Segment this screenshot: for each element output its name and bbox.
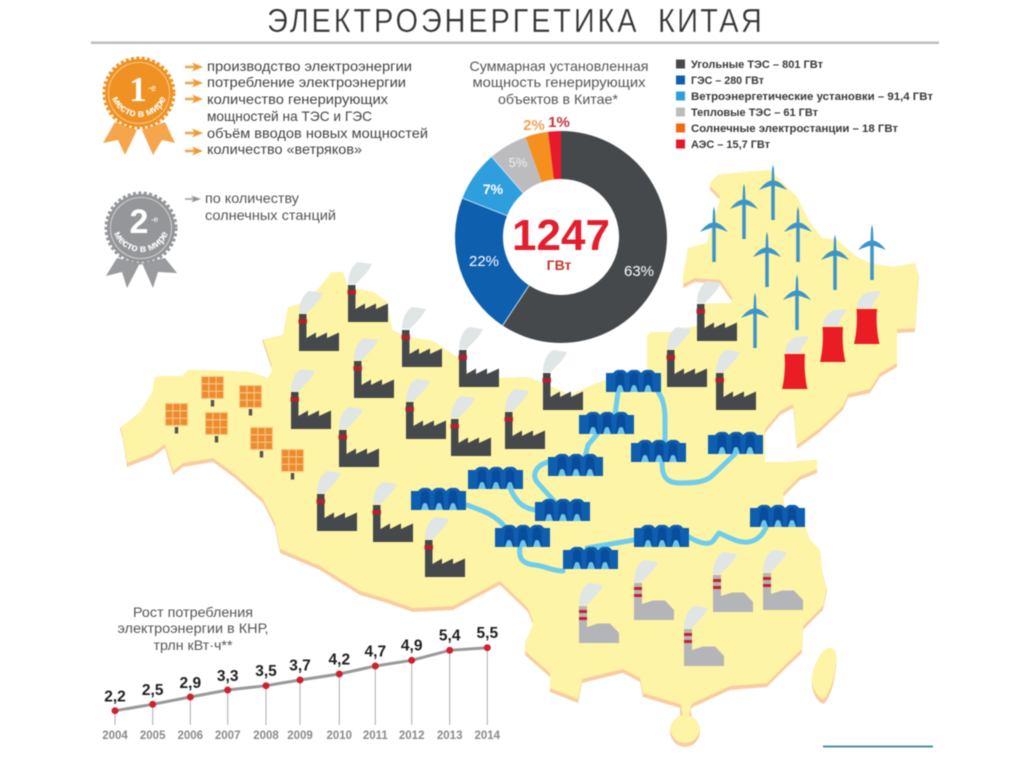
line chart: electricity consumption: 2009 xyxy=(287,730,313,742)
line chart: electricity consumption: 2,2 xyxy=(104,688,126,706)
legend: ГЭС – 280 ГВт xyxy=(691,75,765,87)
badge: 1st place: место в мире xyxy=(112,96,166,118)
donut heading: Суммарная установленная xyxy=(470,58,648,74)
icons: coal power plants xyxy=(290,262,756,577)
line chart: electricity consumption: 4,2 xyxy=(329,652,350,668)
rivers xyxy=(467,392,767,571)
donut chart: 22% xyxy=(469,253,499,270)
list: second place items: солнечных станций xyxy=(205,207,336,223)
line chart: electricity consumption: 3,5 xyxy=(255,663,277,680)
badge: 2nd place: место в мире xyxy=(114,231,168,253)
donut chart: 63% xyxy=(624,263,654,280)
donut chart: 1247 xyxy=(512,211,610,260)
line chart: electricity consumption: 2013 xyxy=(437,730,462,742)
badge: 1st place: -е xyxy=(148,83,156,93)
map of China xyxy=(120,166,919,747)
icons: thermal power plants xyxy=(579,550,803,666)
line chart: electricity consumption: 3,3 xyxy=(217,668,239,685)
badge: 2nd place: 2 xyxy=(130,203,148,241)
line chart: electricity consumption: 4,7 xyxy=(365,644,386,660)
icons: nuclear cooling towers xyxy=(782,291,881,389)
list: first place items xyxy=(185,58,428,157)
badge: 1st place: 1 xyxy=(129,70,147,109)
donut heading: мощность генерирующих xyxy=(472,74,646,90)
line chart: electricity consumption: 5,4 xyxy=(439,628,461,644)
chart heading: трлн кВт·ч** xyxy=(154,637,233,653)
legend xyxy=(676,59,934,151)
line chart: electricity consumption: 2012 xyxy=(399,730,424,742)
line chart: electricity consumption: 2,5 xyxy=(142,682,164,699)
icons: hydro dams xyxy=(411,370,805,569)
legend: Солнечные электростанции – 18 ГВт xyxy=(691,123,899,135)
line chart: electricity consumption: 2008 xyxy=(253,730,279,742)
list: first place items: мощностей на ТЭС и ГЭС xyxy=(207,108,372,124)
line chart: electricity consumption: 2,9 xyxy=(180,675,201,692)
list: first place items: производство электроэнергии xyxy=(207,58,412,74)
icons: wind turbines xyxy=(700,164,886,348)
donut heading: объектов в Китае* xyxy=(498,91,619,107)
line chart: electricity consumption: 3,7 xyxy=(289,658,311,674)
line chart: electricity consumption: 2007 xyxy=(215,730,240,742)
line chart: electricity consumption: 2005 xyxy=(140,730,166,742)
chart heading: Рост потребления xyxy=(133,604,253,620)
chart heading xyxy=(118,604,268,653)
donut chart: 1% xyxy=(548,114,570,131)
list: second place items xyxy=(185,190,336,223)
donut chart: 2% xyxy=(523,117,545,134)
badge: 2nd place xyxy=(104,191,178,288)
badge: 1st place xyxy=(102,56,176,156)
list: first place items: количество генерирующих xyxy=(207,91,388,107)
line chart: electricity consumption: 2006 xyxy=(178,730,203,742)
donut chart: ГВт xyxy=(547,257,572,273)
line chart: electricity consumption xyxy=(102,625,501,742)
line chart: electricity consumption: 2010 xyxy=(327,730,352,742)
chart heading: электроэнергии в КНР, xyxy=(118,620,268,636)
line chart: electricity consumption: 2014 xyxy=(475,730,501,742)
donut chart xyxy=(455,114,667,343)
donut chart: 5% xyxy=(509,155,528,170)
title: КИТАЯ xyxy=(658,2,762,39)
icons: solar panels xyxy=(165,376,304,480)
line chart: electricity consumption: 2011 xyxy=(363,730,388,742)
line chart: electricity consumption: 2004 xyxy=(102,730,128,742)
list: first place items: количество «ветряков» xyxy=(207,141,362,157)
list: first place items: объём вводов новых мощностей xyxy=(207,125,428,141)
badge: 2nd place: -е xyxy=(151,215,159,224)
legend: Угольные ТЭС – 801 ГВт xyxy=(691,59,824,71)
line chart: electricity consumption: 5,5 xyxy=(477,625,498,642)
list: second place items: по количеству xyxy=(205,190,299,206)
legend: АЭС – 15,7 ГВт xyxy=(691,139,771,151)
list: first place items: потребление электроэнергии xyxy=(207,74,406,90)
legend: Тепловые ТЭС – 61 ГВт xyxy=(691,107,819,119)
line chart: electricity consumption: 4,9 xyxy=(401,638,423,654)
legend: Ветроэнергетические установки – 91,4 ГВт xyxy=(691,91,934,103)
title: ЭЛЕКТРОЭНЕРГЕТИКА xyxy=(267,2,637,39)
donut chart: 7% xyxy=(483,181,504,197)
donut heading xyxy=(470,58,648,107)
